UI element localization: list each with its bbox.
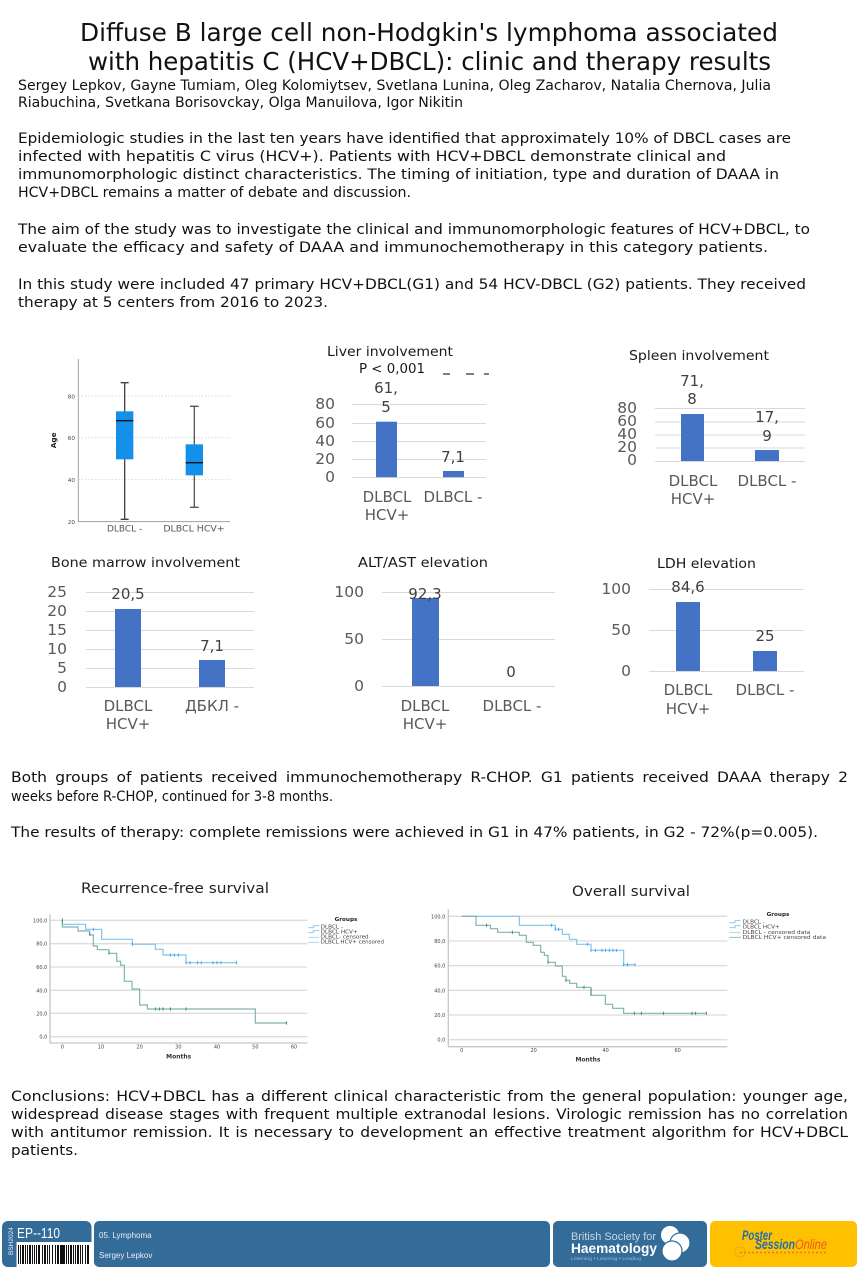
footer: British Society for Haematology logo xyxy=(553,1221,707,1267)
bar chart: LDH elevation: LDH elevation xyxy=(657,557,756,572)
bar chart: LDH elevation: DLBCL - xyxy=(736,681,794,699)
bar chart: liver involvement: DLBCL xyxy=(363,488,412,506)
text block: background: HCV+DBCL remains a matter of debate and discussion. xyxy=(18,185,411,201)
bar chart: LDH elevation: 50 xyxy=(611,621,631,639)
box plot: age: DLBCL - xyxy=(107,525,142,535)
bar chart: ALT/AST elevation xyxy=(334,556,555,733)
text block: study design: therapy at 5 centers from 2016 to 2023. xyxy=(18,295,328,311)
chart: recurrence-free survival curves: 40,0 xyxy=(36,988,47,994)
chart: overall survival curves: DLBCL - xyxy=(743,920,765,926)
box plot: age: 60 xyxy=(68,436,75,442)
text block: conclusions xyxy=(11,1089,848,1159)
bar chart: spleen involvement: Spleen involvement xyxy=(629,349,769,364)
text block: conclusions: with antitumor remission. It is necessary to development an effective treatment algorithm for HCV+DBCL xyxy=(11,1125,848,1141)
box plot: age: 80 xyxy=(68,394,75,400)
text block: conclusions: Conclusions: HCV+DBCL has a different clinical characteristic from the general population: younger age, xyxy=(11,1089,848,1105)
box plot: age xyxy=(49,359,230,535)
chart: overall survival curves: 40,0 xyxy=(434,988,445,994)
footer: Poster Session Online logo xyxy=(710,1221,857,1267)
chart: overall survival curves: 60 xyxy=(674,1048,681,1054)
footer: Poster Session Online logo: Online xyxy=(795,1236,827,1252)
text block: background xyxy=(18,131,791,201)
bar chart: liver involvement: 61, xyxy=(374,379,398,397)
text block: treatment: Both groups of patients received immunochemotherapy R-CHOP. G1 patients received DAAA therapy 2 xyxy=(11,770,848,786)
bar chart: ALT/AST elevation: 100 xyxy=(334,583,364,601)
box plot: age: DLBCL HCV+ xyxy=(163,525,225,535)
chart: recurrence-free survival curves: 10 xyxy=(98,1044,104,1050)
bar chart: liver involvement: 80 xyxy=(315,395,335,413)
chart: recurrence-free survival curves: 0,0 xyxy=(39,1035,47,1041)
bar chart: liver involvement xyxy=(315,345,489,524)
bar chart: spleen involvement: DLBCL - xyxy=(738,472,796,490)
bar chart: liver involvement: 7,1 xyxy=(441,448,465,466)
bar chart: spleen involvement: 20 xyxy=(617,438,637,456)
bar chart: bone marrow involvement: 20 xyxy=(47,602,67,620)
authors xyxy=(18,78,771,111)
footer: Poster Session Online logo: Session xyxy=(755,1236,795,1252)
chart: recurrence-free survival curves: 60,0 xyxy=(36,965,47,971)
bar chart: bone marrow involvement: 20,5 xyxy=(111,585,145,603)
chart: recurrence-free survival curves: 50 xyxy=(252,1044,259,1050)
text block: aim xyxy=(17,222,810,256)
bar chart: bone marrow involvement: 5 xyxy=(57,659,67,677)
chart: recurrence-free survival curves: 30 xyxy=(175,1044,182,1050)
bar chart: liver involvement: 0 xyxy=(325,468,335,486)
bar chart: ALT/AST elevation: 50 xyxy=(344,630,364,648)
text block: aim: The aim of the study was to investigate the clinical and immunomorphologic features of HCV+DBCL, to xyxy=(17,222,810,238)
bar chart: ALT/AST elevation: DLBCL xyxy=(401,697,450,715)
title: with hepatitis C (HCV+DBCL): clinic and therapy results xyxy=(88,47,771,76)
text block: background: infected with hepatitis C virus (HCV+). Patients with HCV+DBCL demonstrate clinical and xyxy=(18,149,726,165)
footer: British Society for Haematology logo: British Society for xyxy=(571,1231,656,1243)
chart: overall survival curves: 60,0 xyxy=(434,964,445,970)
bar chart: bone marrow involvement: Bone marrow involvement xyxy=(51,556,240,571)
footer: British Society for Haematology logo: Haematology xyxy=(571,1240,657,1256)
chart: overall survival curves: DLBCL HCV+ xyxy=(743,925,780,931)
chart: overall survival curves: Months xyxy=(575,1057,601,1064)
bar chart: liver involvement: 20 xyxy=(315,450,335,468)
title: Diffuse B large cell non-Hodgkin's lymphoma associated xyxy=(80,18,778,47)
text block: study design: In this study were included 47 primary HCV+DBCL(G1) and 54 HCV-DBCL (G2) patients. They received xyxy=(18,277,806,293)
text block: study design xyxy=(18,277,806,311)
bar chart: bone marrow involvement xyxy=(47,556,254,733)
footer: British Society for Haematology logo: Listening • Learning • Leading xyxy=(571,1256,642,1261)
chart: recurrence-free survival curves: 20,0 xyxy=(36,1011,47,1017)
bar chart: ALT/AST elevation: ALT/AST elevation xyxy=(358,556,488,571)
chart: overall survival curves: DLBCL HCV+ censored data xyxy=(743,935,826,941)
bar chart: bone marrow involvement: HCV+ xyxy=(106,715,150,733)
bar chart: spleen involvement: 40 xyxy=(617,425,637,443)
bar chart: bone marrow involvement: 25 xyxy=(47,583,67,601)
chart: overall survival curves: 40 xyxy=(602,1048,609,1054)
bar chart: bone marrow involvement: 7,1 xyxy=(200,637,224,655)
bar chart: spleen involvement: 0 xyxy=(627,451,637,469)
bar chart: liver involvement: DLBCL - xyxy=(424,488,482,506)
footer: poster id with barcode: EP--110 xyxy=(17,1226,60,1242)
bar chart: spleen involvement: HCV+ xyxy=(671,490,715,508)
bar chart: LDH elevation: DLBCL xyxy=(664,681,713,699)
footer: category and presenter panel: Sergey Lepkov xyxy=(99,1251,152,1260)
footer: category and presenter panel: 05. Lymphoma xyxy=(99,1231,152,1240)
bar chart: LDH elevation: 100 xyxy=(601,580,631,598)
bar chart: ALT/AST elevation: HCV+ xyxy=(403,715,447,733)
chart: recurrence-free survival curves: 100,0 xyxy=(33,918,47,924)
bar chart: liver involvement: P < 0,001 xyxy=(359,362,425,377)
bar chart: ALT/AST elevation: 0 xyxy=(506,663,516,681)
chart: recurrence-free survival curves: 0 xyxy=(61,1044,64,1050)
chart: overall survival curves: 20,0 xyxy=(434,1013,445,1019)
footer: poster id with barcode xyxy=(2,1221,92,1267)
bar chart: bone marrow involvement: DLBCL xyxy=(104,697,153,715)
chart: recurrence-free survival curves: 80,0 xyxy=(36,942,47,948)
footer: Poster Session Online logo: Poster xyxy=(742,1227,773,1243)
text block: conclusions: widespread disease stages with frequent multiple extranodal lesions. Virologic remission has no correlation xyxy=(11,1107,848,1123)
bar chart: bone marrow involvement: 15 xyxy=(47,621,67,639)
title xyxy=(80,18,778,76)
text block: results: The results of therapy: complete remissions were achieved in G1 in 47% patients, in G2 - 72%(p=0.005). xyxy=(10,825,818,841)
bar chart: spleen involvement: 80 xyxy=(617,399,637,417)
chart: overall survival curves: DLBCL - censored data xyxy=(743,930,810,936)
bar chart: ALT/AST elevation: 0 xyxy=(354,677,364,695)
bar chart: bone marrow involvement: ДБКЛ - xyxy=(185,697,239,715)
box plot: age: 20 xyxy=(68,520,75,526)
bar chart: spleen involvement: 9 xyxy=(762,427,772,445)
footer: poster id with barcode: BSH2024 xyxy=(8,1227,15,1255)
bar chart: liver involvement: HCV+ xyxy=(365,506,409,524)
footer: category and presenter panel xyxy=(94,1221,550,1267)
bar chart: LDH elevation: 84,6 xyxy=(671,578,705,596)
bar chart: bone marrow involvement: 10 xyxy=(47,640,67,658)
chart: recurrence-free survival curves xyxy=(33,914,384,1060)
bar chart: spleen involvement: 17, xyxy=(755,408,779,426)
text block: background: immunomorphologic distinct characteristics. The timing of initiation, type and duration of DAAA in xyxy=(18,167,779,183)
chart: recurrence-free survival curves: 60 xyxy=(291,1044,297,1050)
text block: conclusions: patients. xyxy=(11,1143,78,1159)
chart: overall survival curves: 100,0 xyxy=(431,914,445,920)
chart: recurrence-free survival curves: DLBCL- censored xyxy=(321,935,369,941)
bar chart: spleen involvement: 71, xyxy=(680,372,704,390)
bar chart: liver involvement: 60 xyxy=(315,414,335,432)
bar chart: ALT/AST elevation: 92,3 xyxy=(408,585,442,603)
chart: recurrence-free survival curves: Months xyxy=(166,1053,192,1060)
bar chart: liver involvement: Liver involvement xyxy=(327,345,453,360)
chart: recurrence-free survival curves: DLBCL - xyxy=(321,925,343,931)
authors: Sergey Lepkov, Gayne Tumiam, Oleg Kolomiytsev, Svetlana Lunina, Oleg Zacharov, Natalia Chernova, Julia xyxy=(18,78,771,94)
bar chart: liver involvement: 40 xyxy=(315,432,335,450)
heading: recurrence-free survival: Recurrence-free survival xyxy=(81,881,269,897)
chart: overall survival curves xyxy=(431,909,826,1064)
box plot: age: Age xyxy=(49,432,58,448)
chart: recurrence-free survival curves: 40 xyxy=(214,1044,220,1050)
bar chart: spleen involvement xyxy=(617,349,805,508)
bar chart: liver involvement: 5 xyxy=(381,398,391,416)
chart: overall survival curves: 20 xyxy=(530,1048,537,1054)
chart: recurrence-free survival curves: DLBCL HCV+ censored xyxy=(321,940,384,946)
chart: recurrence-free survival curves: Groups xyxy=(335,917,358,923)
chart: recurrence-free survival curves: DLBCL HCV+ xyxy=(321,930,358,936)
text block: treatment xyxy=(11,770,848,805)
bar chart: LDH elevation: 25 xyxy=(755,627,775,645)
chart: overall survival curves: Groups xyxy=(767,912,790,918)
bar chart: LDH elevation: 0 xyxy=(621,662,631,680)
chart: overall survival curves: 80,0 xyxy=(434,939,445,945)
bar chart: LDH elevation xyxy=(601,557,804,718)
text block: background: Epidemiologic studies in the last ten years have identified that approximately 10% of DBCL cases are xyxy=(18,131,791,147)
authors: Riabuchina, Svetkana Borisovckay, Olga Manuilova, Igor Nikitin xyxy=(18,95,463,111)
text block: treatment: weeks before R-CHOP, continued for 3-8 months. xyxy=(11,789,333,805)
heading: overall survival: Overall survival xyxy=(572,884,690,900)
bar chart: spleen involvement: DLBCL xyxy=(669,472,718,490)
bar chart: bone marrow involvement: 0 xyxy=(57,678,67,696)
bar chart: spleen involvement: 8 xyxy=(687,390,697,408)
chart: overall survival curves: 0 xyxy=(460,1048,463,1054)
bar chart: spleen involvement: 60 xyxy=(617,412,637,430)
chart: recurrence-free survival curves: 20 xyxy=(136,1044,143,1050)
bar chart: ALT/AST elevation: DLBCL - xyxy=(483,697,541,715)
chart: overall survival curves: 0,0 xyxy=(437,1038,445,1044)
bar chart: LDH elevation: HCV+ xyxy=(666,700,710,718)
text block: aim: evaluate the efficacy and safety of DAAA and immunochemotherapy in this category patients. xyxy=(18,240,768,256)
box plot: age: 40 xyxy=(68,478,75,484)
